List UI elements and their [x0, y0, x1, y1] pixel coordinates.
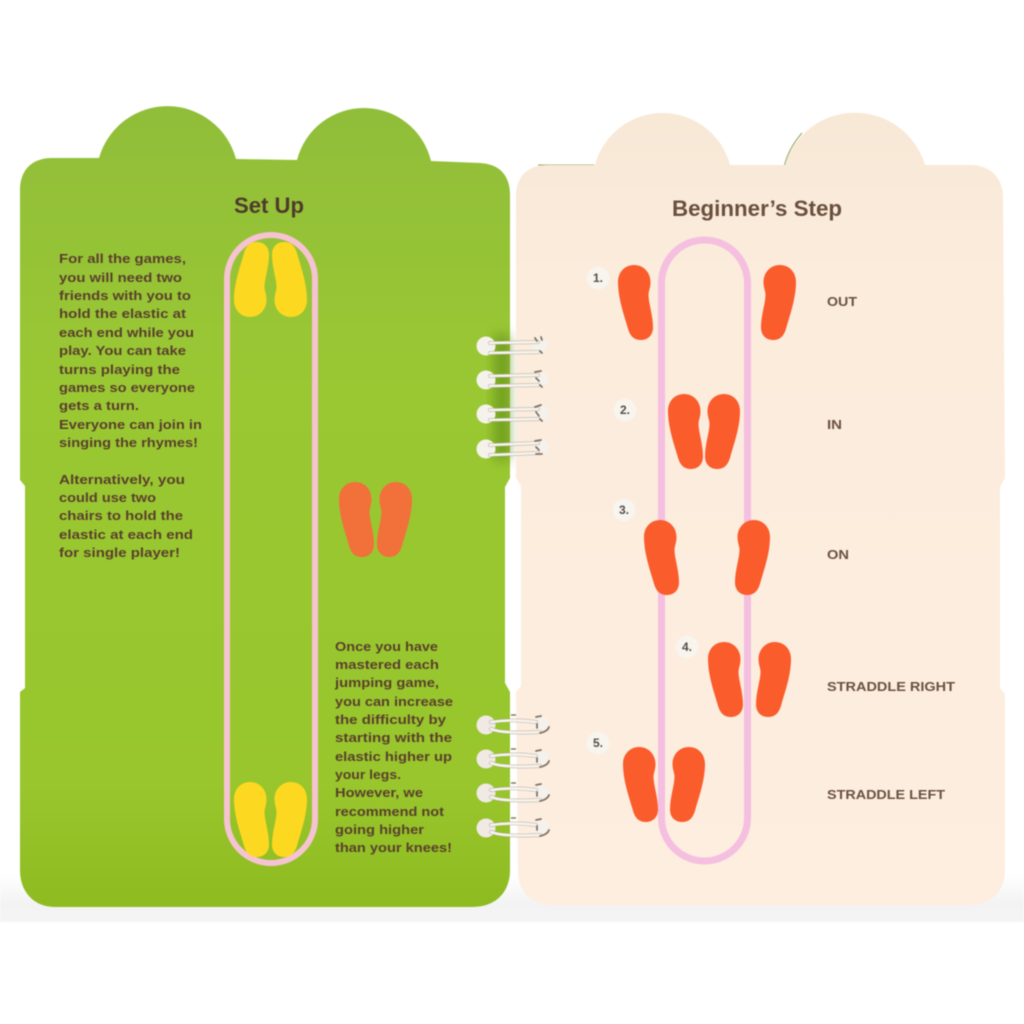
text block: intro: gets a turn. [59, 399, 139, 413]
text block: intro: play. You can take [59, 344, 186, 358]
text block: intro: turns playing the [59, 363, 180, 377]
number badge 1: 1. [593, 271, 603, 285]
spiral binding: upper rings [476, 336, 549, 458]
number badge 4: 4. [682, 640, 692, 654]
feet apart outside loop [618, 265, 796, 340]
text block: intro: hold the elastic at [59, 307, 187, 321]
number badge 3 [612, 498, 636, 522]
text block: intro: you will need two [59, 271, 182, 285]
number badge 2: 2. [620, 403, 630, 417]
text block: alternative [59, 473, 193, 560]
text block: intro: games so everyone [59, 381, 195, 395]
feet on loop [644, 520, 770, 595]
step 1: out [586, 265, 857, 340]
text block: difficulty: However, we [335, 786, 423, 800]
step 4: straddle right [676, 636, 955, 717]
surface shadow [0, 875, 1024, 922]
cream page shape [516, 113, 1005, 905]
elastic loop [227, 235, 315, 863]
panel: set up [20, 106, 510, 907]
ring 1 [476, 336, 548, 356]
text block: difficulty: going higher [335, 823, 424, 837]
heading: set up: Set Up [234, 193, 304, 218]
text block: difficulty: jumping game, [334, 676, 439, 690]
spiral binding: lower rings [476, 715, 549, 838]
ring 4 [476, 439, 549, 458]
ring 2 [476, 370, 548, 390]
ring 6 [476, 750, 549, 768]
number badge 3: 3. [619, 503, 629, 517]
step 3: on [612, 498, 849, 595]
label: out: OUT [827, 295, 857, 309]
label: on: ON [827, 548, 849, 562]
label: straddle right: STRADDLE RIGHT [827, 680, 955, 694]
step 2: in [614, 394, 842, 469]
feet: orange side pair [339, 482, 412, 557]
text block: intro: friends with you to [59, 289, 191, 303]
number badge 2 [614, 398, 636, 422]
feet inside loop [668, 394, 740, 469]
elastic loop [662, 240, 748, 861]
text block: alternative: chairs to hold the [59, 509, 183, 523]
text block: difficulty: Once you have [335, 640, 438, 654]
ring 7 [476, 784, 549, 802]
feet straddling left side [623, 747, 705, 822]
green page shape [20, 106, 510, 907]
number badge 5 [586, 732, 610, 754]
ring 3 [476, 404, 549, 424]
binding ticks [511, 715, 516, 818]
feet: yellow bottom pair [234, 782, 307, 857]
text block: difficulty: starting with the [335, 731, 452, 745]
feet: yellow top pair [234, 242, 307, 317]
text block: intro: For all the games, [59, 252, 186, 266]
text block: difficulty: recommend not [335, 805, 445, 819]
number badge 5: 5. [593, 736, 603, 750]
label: straddle left: STRADDLE LEFT [827, 788, 945, 802]
text block: alternative: could use two [59, 491, 156, 505]
text block: difficulty: mastered each [335, 658, 439, 672]
text block: alternative: elastic at each end [59, 528, 193, 542]
number badge 1 [586, 266, 610, 290]
text block: intro: Everyone can join in [59, 418, 202, 432]
panel: beginner's step [516, 113, 1005, 905]
text block: alternative: Alternatively, you [59, 473, 185, 487]
text block: difficulty: the difficulty by [335, 713, 446, 727]
heading: beginner's step: Beginner’s Step [672, 196, 842, 221]
feet straddling right side [708, 642, 791, 717]
ring 8 [476, 818, 549, 838]
text block: difficulty: than your knees! [335, 841, 452, 855]
text block: intro: singing the rhymes! [59, 436, 198, 450]
text block: difficulty: elastic higher up [335, 750, 452, 764]
text block: alternative: for single player! [59, 546, 180, 560]
ring 5 [476, 716, 549, 734]
page shadow near binding [494, 335, 510, 460]
text block: difficulty [334, 640, 453, 855]
text block: intro [59, 252, 202, 450]
step 5: straddle left [586, 732, 945, 822]
label: in: IN [827, 418, 842, 432]
text block: intro: each end while you [59, 326, 194, 340]
text block: difficulty: your legs. [335, 768, 401, 782]
text block: difficulty: you can increase [335, 695, 453, 709]
page edge behind the right page [538, 133, 802, 165]
number badge 4 [676, 636, 698, 658]
